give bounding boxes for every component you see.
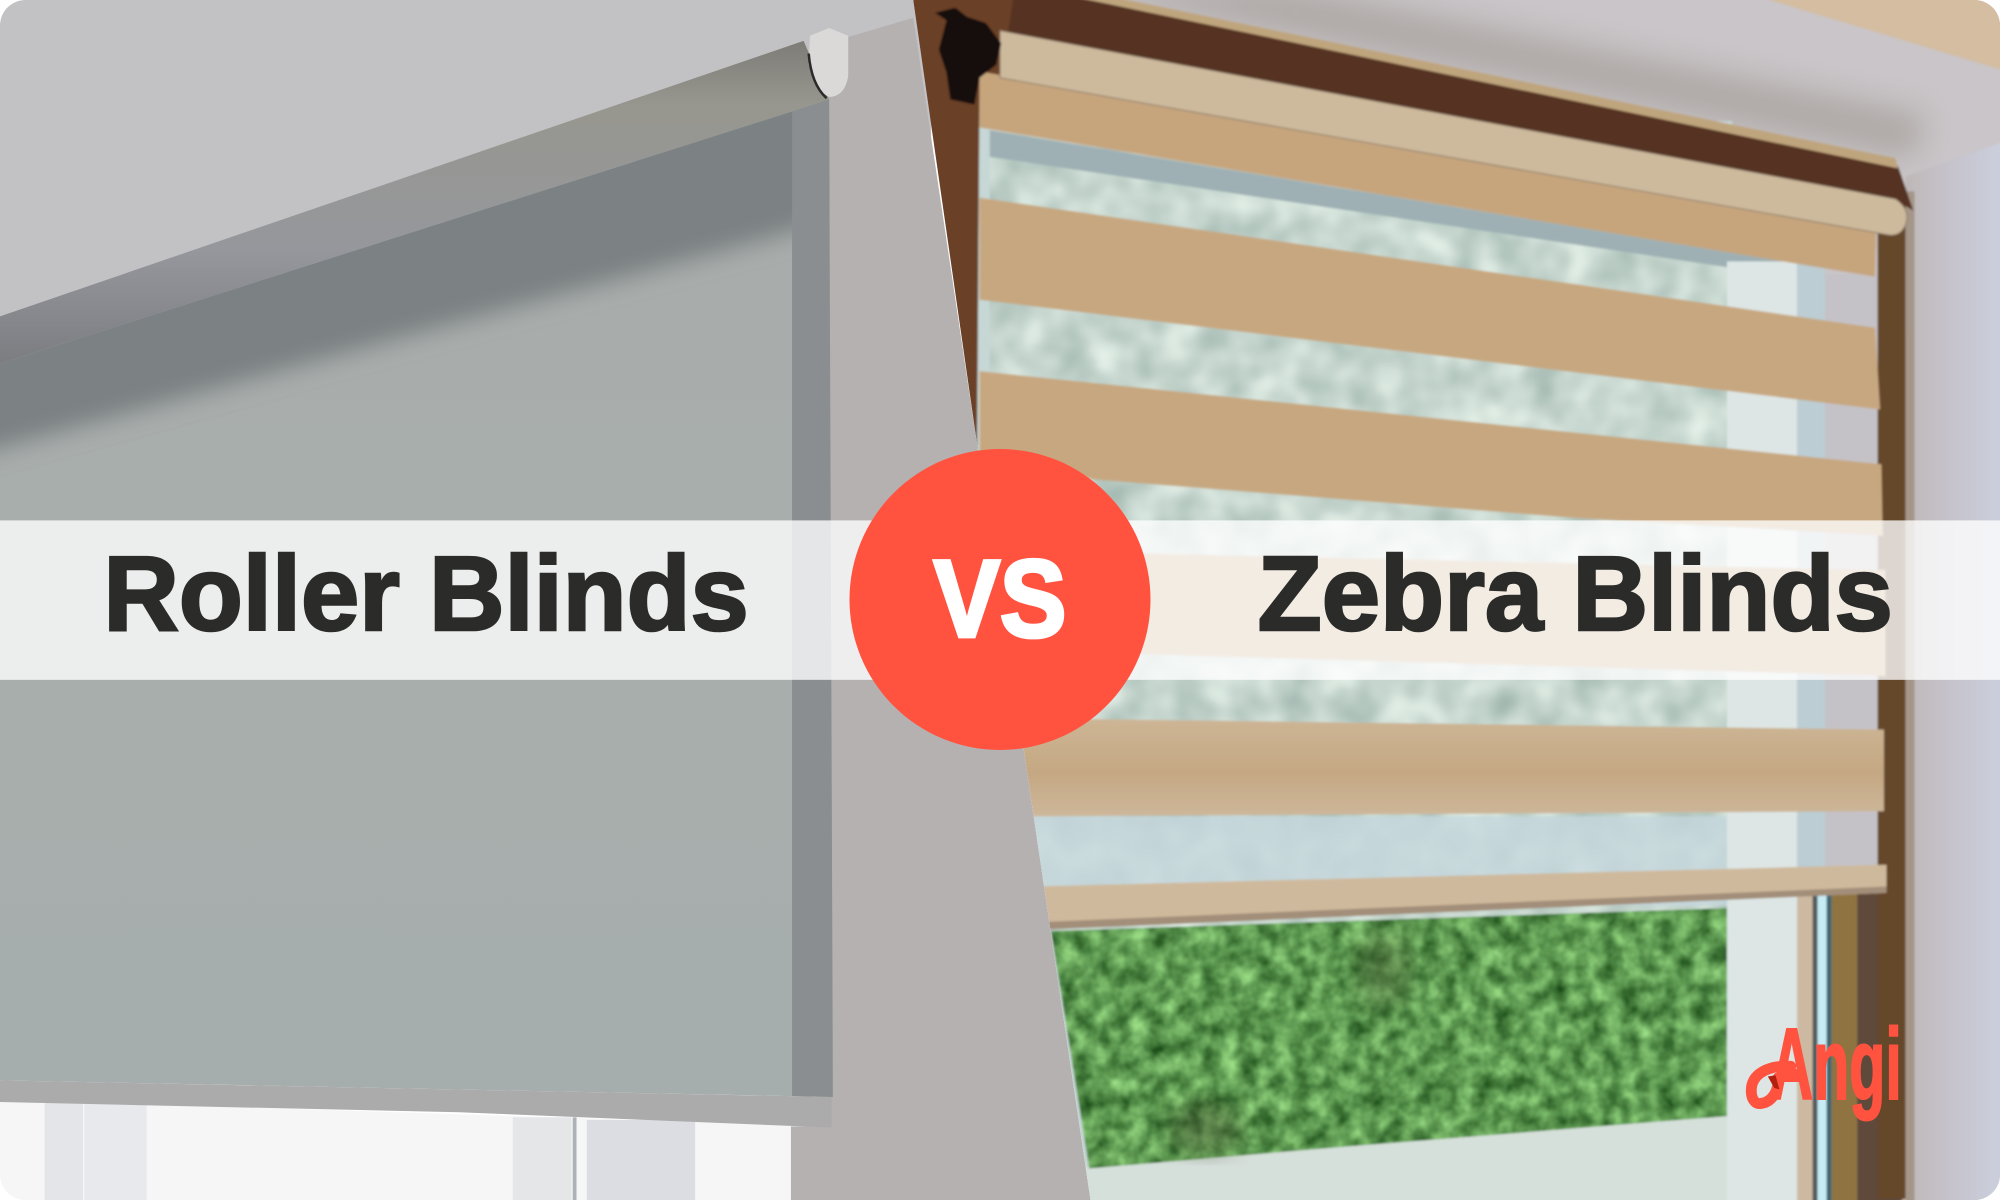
- ceiling: [0, 0, 931, 383]
- window below the blind: [0, 1099, 832, 1200]
- zebra cassette: [1000, 31, 1907, 235]
- window glass: [944, 121, 1732, 1200]
- panel: zebra blinds photo: [893, 0, 2000, 1200]
- photo contents: [893, 0, 2000, 1200]
- panel: roller blinds photo: [0, 0, 1091, 1200]
- zebra band 6: [1033, 865, 1886, 930]
- hedge of trees: [1046, 908, 1727, 1170]
- zebra band 5: [1014, 718, 1884, 816]
- white window jamb: [1727, 261, 1797, 1200]
- zebra band 4: [1097, 552, 1885, 676]
- roller blind fabric: [0, 226, 806, 1096]
- lower glass tint: [990, 816, 1727, 906]
- wall bracket: [809, 28, 848, 97]
- logo: Angi: Angi: [1770, 1009, 1902, 1121]
- wall beside roller blind: [791, 18, 1091, 1200]
- vs badge: [849, 449, 1151, 750]
- vs badge: VS: [934, 538, 1066, 660]
- bracket shadow: [809, 54, 827, 98]
- ceiling: [1876, 166, 1904, 274]
- window sill rail: [989, 130, 1780, 268]
- wooden window frame: [1797, 191, 1915, 1200]
- upper-right cream ceiling strip: [1768, 0, 2000, 70]
- zebra band 3: [980, 371, 1883, 536]
- wooden top frame: [1000, 0, 1913, 210]
- roller headrail: [0, 41, 829, 364]
- black mounting bracket: [935, 8, 1001, 105]
- zebra band 2: [980, 198, 1880, 409]
- band 6 lower edge: [1040, 886, 1886, 930]
- base fill: [893, 0, 2000, 1200]
- heading: roller blinds: Roller Blinds: [103, 535, 749, 653]
- right wall: [1906, 138, 2000, 1200]
- blind bottom bar: [0, 1080, 832, 1128]
- pale lawn: [1071, 1116, 1727, 1200]
- logo: Angi: [1751, 1009, 1902, 1121]
- zebra band 1: [980, 71, 1876, 277]
- title band: [0, 520, 2000, 680]
- heading: zebra blinds: Zebra Blinds: [1258, 535, 1893, 653]
- blind shading: [0, 77, 842, 1110]
- wooden left frame: [913, 0, 1014, 450]
- shadow above frame: [1059, 0, 1926, 159]
- window reveal above bottom rail: [1797, 261, 1878, 899]
